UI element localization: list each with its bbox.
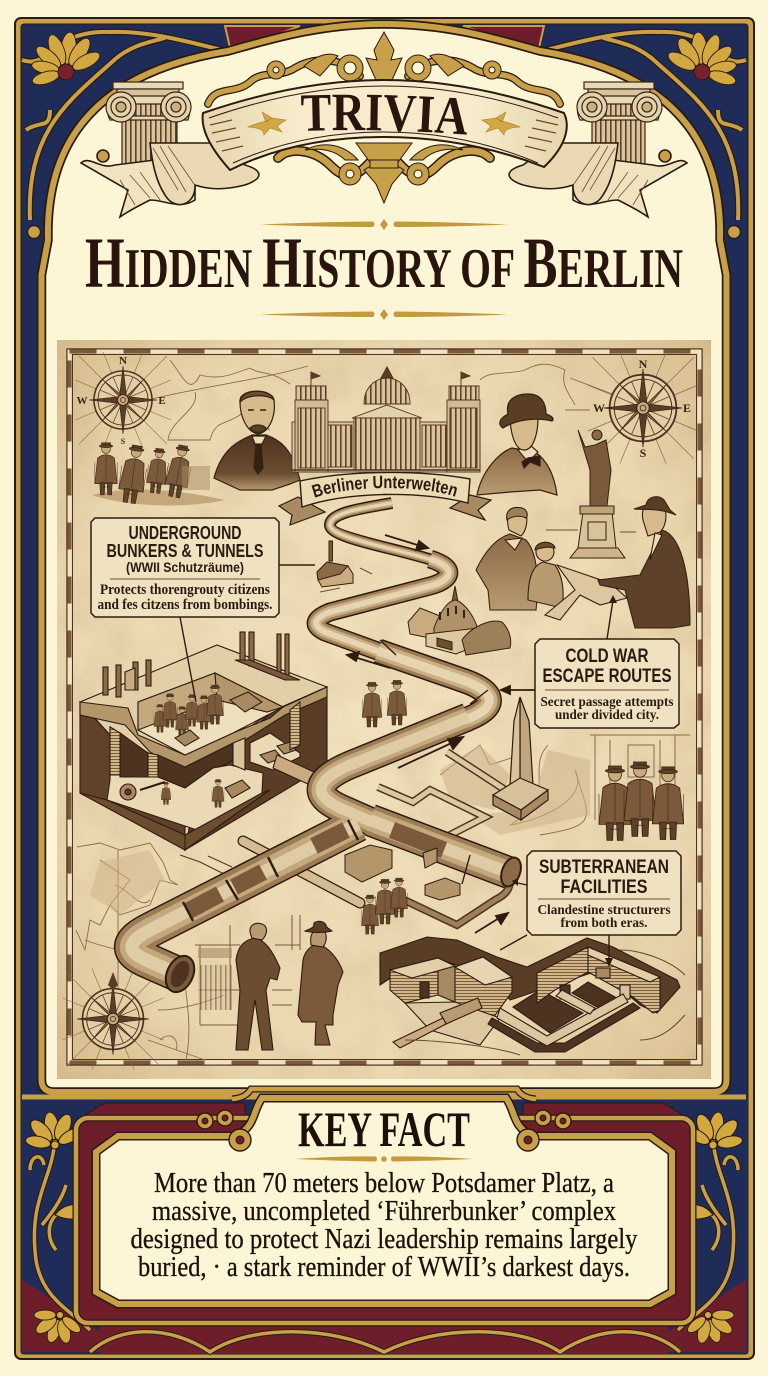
divider [260, 219, 508, 230]
compass rose: bottom left [63, 969, 163, 1069]
lower rooms [107, 727, 263, 830]
scroll ornaments beside tab [197, 1110, 571, 1151]
side room [250, 733, 300, 770]
pipe cutaway windows [188, 830, 444, 911]
building cluster [408, 586, 511, 655]
key fact body text [130, 1168, 638, 1283]
small house with chimney [317, 541, 372, 592]
pipe mouth [164, 954, 196, 994]
people examining a map [476, 497, 690, 628]
compass rose: top left: S [121, 437, 126, 446]
key fact body text: designed to protect Nazi leadership remains largely [130, 1224, 638, 1255]
underground facility [380, 937, 685, 1055]
men in conversation [195, 915, 343, 1050]
central group with crates [345, 845, 460, 934]
callout: cold war escape routes [535, 595, 679, 728]
ruined walls on surface [103, 632, 300, 697]
earth lip [80, 687, 327, 772]
three officers [590, 735, 690, 840]
callout: bunkers and tunnels: Protects thorengrouty citizens [100, 582, 270, 598]
heading: TRIVIA: TRIVIA [301, 94, 467, 135]
dark floors [513, 982, 615, 1033]
dark walls [120, 733, 233, 788]
left ribbon tail [81, 143, 259, 217]
arch scrolls [28, 226, 740, 238]
compass rose: top left: E [158, 395, 166, 407]
callout: subterranean facilities [500, 851, 681, 967]
arrows [347, 535, 535, 933]
statue on pedestal [546, 430, 636, 558]
compass rose: top right: S [640, 446, 647, 460]
top scrollwork [208, 32, 560, 104]
compass rose: top left: W [76, 395, 88, 407]
flower ornaments [20, 1107, 748, 1351]
compass rose: top left [75, 352, 171, 448]
sketch map lines [76, 360, 615, 1060]
main tunnel pipeline [132, 503, 525, 997]
title: HIDDEN HISTORY OF BERLIN [85, 223, 683, 303]
ground surface [79, 644, 328, 753]
right walls [537, 947, 588, 1003]
dark earth trench [380, 937, 680, 1013]
callout: cold war escape routes: ESCAPE ROUTES [542, 666, 672, 687]
arched cream panel [42, 24, 726, 1092]
left ionic column [106, 82, 191, 170]
soldiers trudging [92, 443, 225, 505]
buried pipes [440, 998, 482, 1024]
inner frame and text panel [96, 1098, 672, 1304]
upper room figures [154, 685, 262, 746]
main ribbon [203, 80, 567, 170]
header ornament: columns, ribbon and TRIVIA [80, 31, 688, 219]
compass rose: top right [588, 353, 698, 463]
bunker left side [80, 702, 185, 850]
bunker cutaway [80, 632, 327, 850]
callout: subterranean facilities: SUBTERRANEAN [539, 857, 669, 878]
callout: bunkers and tunnels: and fes citzens from bombings. [98, 597, 272, 613]
divider [295, 1156, 473, 1162]
gold side stems [30, 1140, 738, 1352]
heading: KEY FACT: KEY FACT [298, 1101, 470, 1157]
bottom scrollwork [278, 143, 490, 203]
divider [260, 309, 508, 320]
corner palmette left [29, 29, 105, 94]
handshake figures [362, 680, 407, 727]
callout: bunkers and tunnels [91, 518, 315, 702]
terrain patches [90, 745, 590, 915]
callout: bunkers and tunnels: UNDERGROUND [128, 522, 242, 543]
bunker right side [185, 687, 327, 850]
right ionic column [577, 82, 662, 170]
key fact body text: buried, · a stark reminder of WWII’s darkest days. [138, 1252, 630, 1283]
small thin pipes behind [180, 841, 360, 903]
callout: cold war escape routes: COLD WAR [566, 646, 649, 667]
tunnel corridors [378, 752, 513, 925]
ribbon fleurons [248, 112, 520, 135]
callout: cold war escape routes: Secret passage attempts [540, 695, 674, 710]
arch gold band [42, 24, 726, 1092]
obelisk monument [493, 697, 548, 820]
left block [390, 958, 438, 1003]
compass rose: top right: W [593, 401, 605, 415]
banner: Berliner Unterwelten: Berliner Unterwelten [312, 476, 457, 498]
upper room [138, 673, 283, 755]
callout: subterranean facilities: FACILITIES [560, 877, 648, 898]
panel: key fact frame [20, 1089, 748, 1354]
key fact body text: massive, uncompleted ‘Führerbunker’ complex [152, 1196, 616, 1227]
portrait: Lenin-style man [214, 391, 300, 490]
callout: bunkers and tunnels: (WWII Schutzräume) [126, 559, 244, 575]
callout: subterranean facilities: Clandestine structurers [538, 903, 671, 918]
corner palmette right [663, 29, 739, 94]
banner: Berliner Unterwelten [278, 472, 492, 526]
callout: cold war escape routes: under divided city. [555, 708, 659, 723]
Reichstag building [292, 367, 480, 472]
lower room machinery [120, 780, 250, 807]
connecting pipe [273, 755, 314, 785]
compass rose: top right: E [683, 401, 691, 415]
compass rose: top left: N [119, 355, 127, 367]
callout: subterranean facilities: from both eras. [560, 916, 648, 931]
compass rose: top right: N [639, 357, 648, 371]
bunker base slab [80, 790, 270, 850]
portrait: man in bowler hat [477, 394, 557, 495]
right ribbon tail [509, 143, 687, 217]
floor around block [405, 1002, 500, 1045]
callout: bunkers and tunnels: BUNKERS & TUNNELS [106, 540, 264, 561]
panel: parchment map [57, 340, 711, 1079]
key fact body text: More than 70 meters below Potsdamer Platz, a [154, 1168, 614, 1199]
outer frame ring [76, 1118, 693, 1323]
tab cap [232, 1089, 536, 1099]
